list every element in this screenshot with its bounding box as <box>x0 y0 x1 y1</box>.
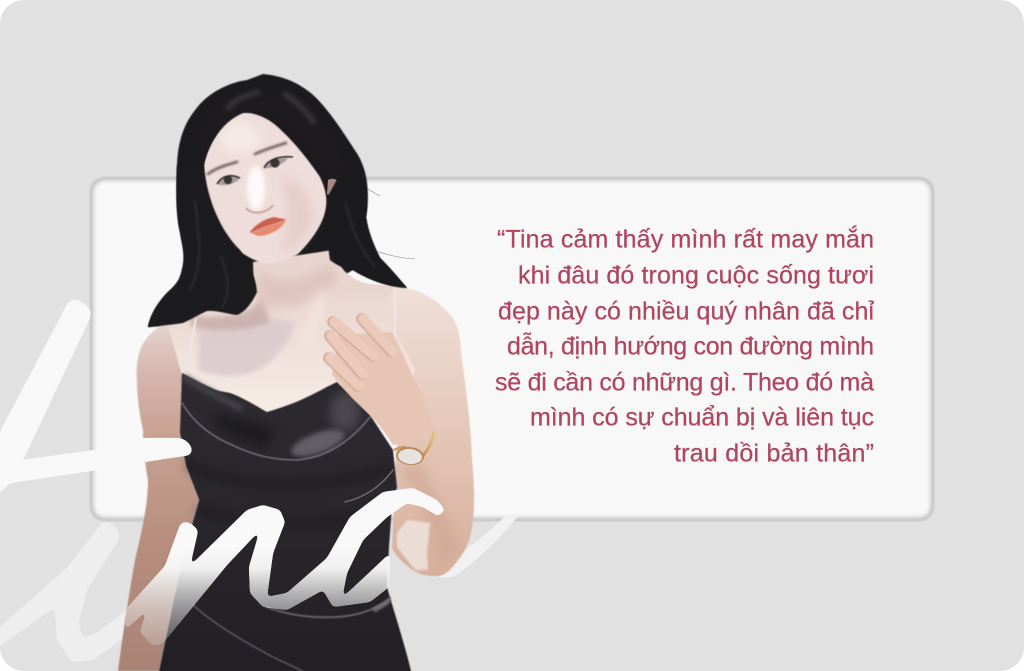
lower arm wash from tail stroke <box>397 520 430 570</box>
watch <box>394 431 434 466</box>
script T crossbar <box>0 438 192 510</box>
collarbone highlight <box>314 292 324 320</box>
transparent straps <box>186 288 396 361</box>
dress satin highlights <box>182 378 393 671</box>
quote text: sẽ đi cần có những gì. Theo đó mà <box>495 368 874 396</box>
cheek shading <box>283 178 313 250</box>
person photo illustration <box>118 74 474 671</box>
forehead highlight <box>220 123 260 153</box>
ear <box>327 179 339 196</box>
satin shine upper right <box>330 392 360 432</box>
hand <box>329 319 432 445</box>
quote text: khi đâu đó trong cuộc sống tươi <box>518 262 874 290</box>
left face shadow <box>205 175 235 245</box>
hair cast shadow <box>190 298 270 330</box>
flyaway hair strands <box>367 188 415 260</box>
hair side fall over neck <box>327 165 407 288</box>
nose shadow <box>246 205 273 213</box>
quote card <box>90 176 934 522</box>
hair strands texture <box>190 200 375 308</box>
satin shine centre <box>290 428 346 458</box>
quote text: trau dồi bản thân” <box>674 440 874 468</box>
hair shine <box>228 92 314 122</box>
main fold line <box>182 403 370 460</box>
hair front lock <box>204 112 247 166</box>
fingers <box>329 319 393 386</box>
left arm <box>118 312 200 671</box>
dark fold <box>217 415 272 446</box>
skirt shine <box>267 598 390 617</box>
right eye <box>264 157 293 168</box>
hair left front over neck <box>148 165 257 327</box>
satin shine upper left <box>186 378 240 408</box>
lips <box>250 217 286 236</box>
lower band shadow <box>181 460 190 478</box>
quote text: đẹp này có nhiều quý nhân đã chỉ <box>498 298 874 326</box>
neck and chest <box>168 250 440 420</box>
arm shading <box>402 464 452 550</box>
neck shadow <box>258 262 338 308</box>
nose highlight <box>247 166 265 210</box>
dress <box>148 373 412 671</box>
script letter T stem <box>0 300 91 492</box>
quote text: “Tina cảm thấy mình rất may mắn <box>497 224 874 254</box>
watermark script over person <box>0 438 450 650</box>
hair back <box>148 74 407 327</box>
script left stroke u <box>0 522 126 662</box>
left eye <box>217 176 240 185</box>
watermark script behind person <box>0 300 519 662</box>
script tail stroke <box>438 515 519 578</box>
chest shadow <box>198 318 296 376</box>
eyebrows <box>208 143 286 174</box>
quote text: mình có sự chuẩn bị và liên tục <box>530 404 874 432</box>
quote text <box>495 224 874 468</box>
face <box>204 113 326 263</box>
quote text: dẫn, định hướng con đường mình <box>507 332 874 360</box>
right shoulder and arm <box>385 286 474 576</box>
script n and a <box>120 485 450 650</box>
